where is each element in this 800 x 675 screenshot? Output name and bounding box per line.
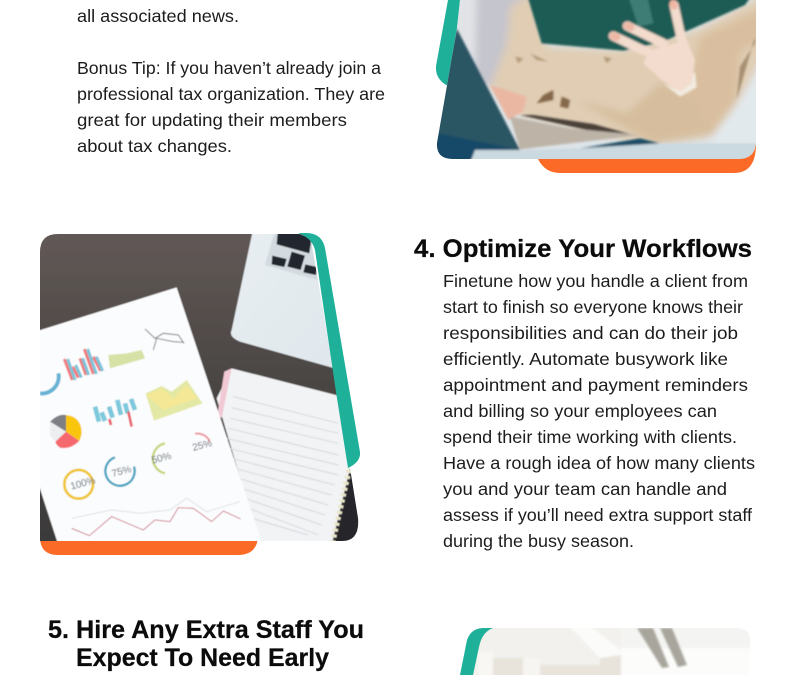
photo contents: 25% [191, 438, 214, 454]
text: step 4 body: and billing so your employees can [443, 401, 717, 421]
photo contents [473, 628, 750, 675]
photo: office interior [460, 628, 750, 675]
report sheet [30, 287, 262, 545]
photo contents [40, 234, 358, 541]
text: step 4 body: you and your team can handle and [443, 479, 727, 499]
orange accent shape [40, 525, 258, 555]
line chart [72, 508, 241, 536]
laptop lid [430, 28, 520, 163]
teal accent band [298, 233, 360, 468]
hand [643, 40, 695, 92]
text: bonus tip: great for updating their members [77, 110, 347, 130]
open book [527, 0, 753, 51]
text: step 4 body: spend their time working with clients. [443, 427, 737, 447]
mini area yellow [146, 380, 203, 421]
text: step 4 body: assess if you’ll need extra support staff [443, 505, 752, 525]
text: step 4 body: responsibilities and can do their job [443, 323, 738, 343]
mini line chart [145, 329, 184, 350]
text: bonus tip: professional tax organization. They are [77, 84, 385, 104]
notebook [217, 368, 352, 545]
teal accent shape [436, 0, 470, 85]
photo contents [430, 0, 773, 163]
mini bars [64, 349, 101, 380]
mini bars blue [95, 399, 135, 422]
photo contents: 75% [111, 464, 133, 480]
text: step 4 body [443, 271, 755, 551]
laptop keyboard base [510, 117, 640, 149]
photo: person reading with laptop [430, 0, 773, 173]
text: step 4 body: Have a rough idea of how many clients [443, 453, 755, 473]
orange accent shape [538, 141, 756, 173]
pie chart [50, 415, 66, 432]
text: step 4 body: appointment and payment reminders [443, 375, 748, 395]
text: bonus tip [77, 6, 385, 156]
text: bonus tip: about tax changes. [77, 136, 232, 156]
text: step 4 body: Finetune how you handle a client from [443, 271, 748, 291]
laptop [230, 234, 332, 368]
heading: step 4: 4. Optimize Your Workflows [414, 235, 752, 263]
mini area green [108, 350, 145, 368]
text: bonus tip: Bonus Tip: If you haven’t already join a [77, 58, 381, 78]
photo: charts on desk [30, 225, 377, 555]
donut rings [64, 470, 93, 499]
text: step 4 body: start to finish so everyone knows their [443, 297, 743, 317]
text: step 4 body: during the busy season. [443, 531, 634, 551]
teal accent shape [460, 628, 500, 675]
heading: step 5 [48, 616, 364, 672]
photo contents: 50% [151, 451, 173, 467]
heading: step 5: 5. Hire Any Extra Staff You [48, 616, 364, 644]
heading: step 5: Expect To Need Early [76, 644, 329, 672]
text: step 4 body: efficiently. Automate busywork like [443, 349, 728, 369]
sleeve cuff [663, 72, 697, 97]
photo contents: 100% [69, 475, 97, 493]
text: bonus tip: all associated news. [77, 6, 239, 26]
